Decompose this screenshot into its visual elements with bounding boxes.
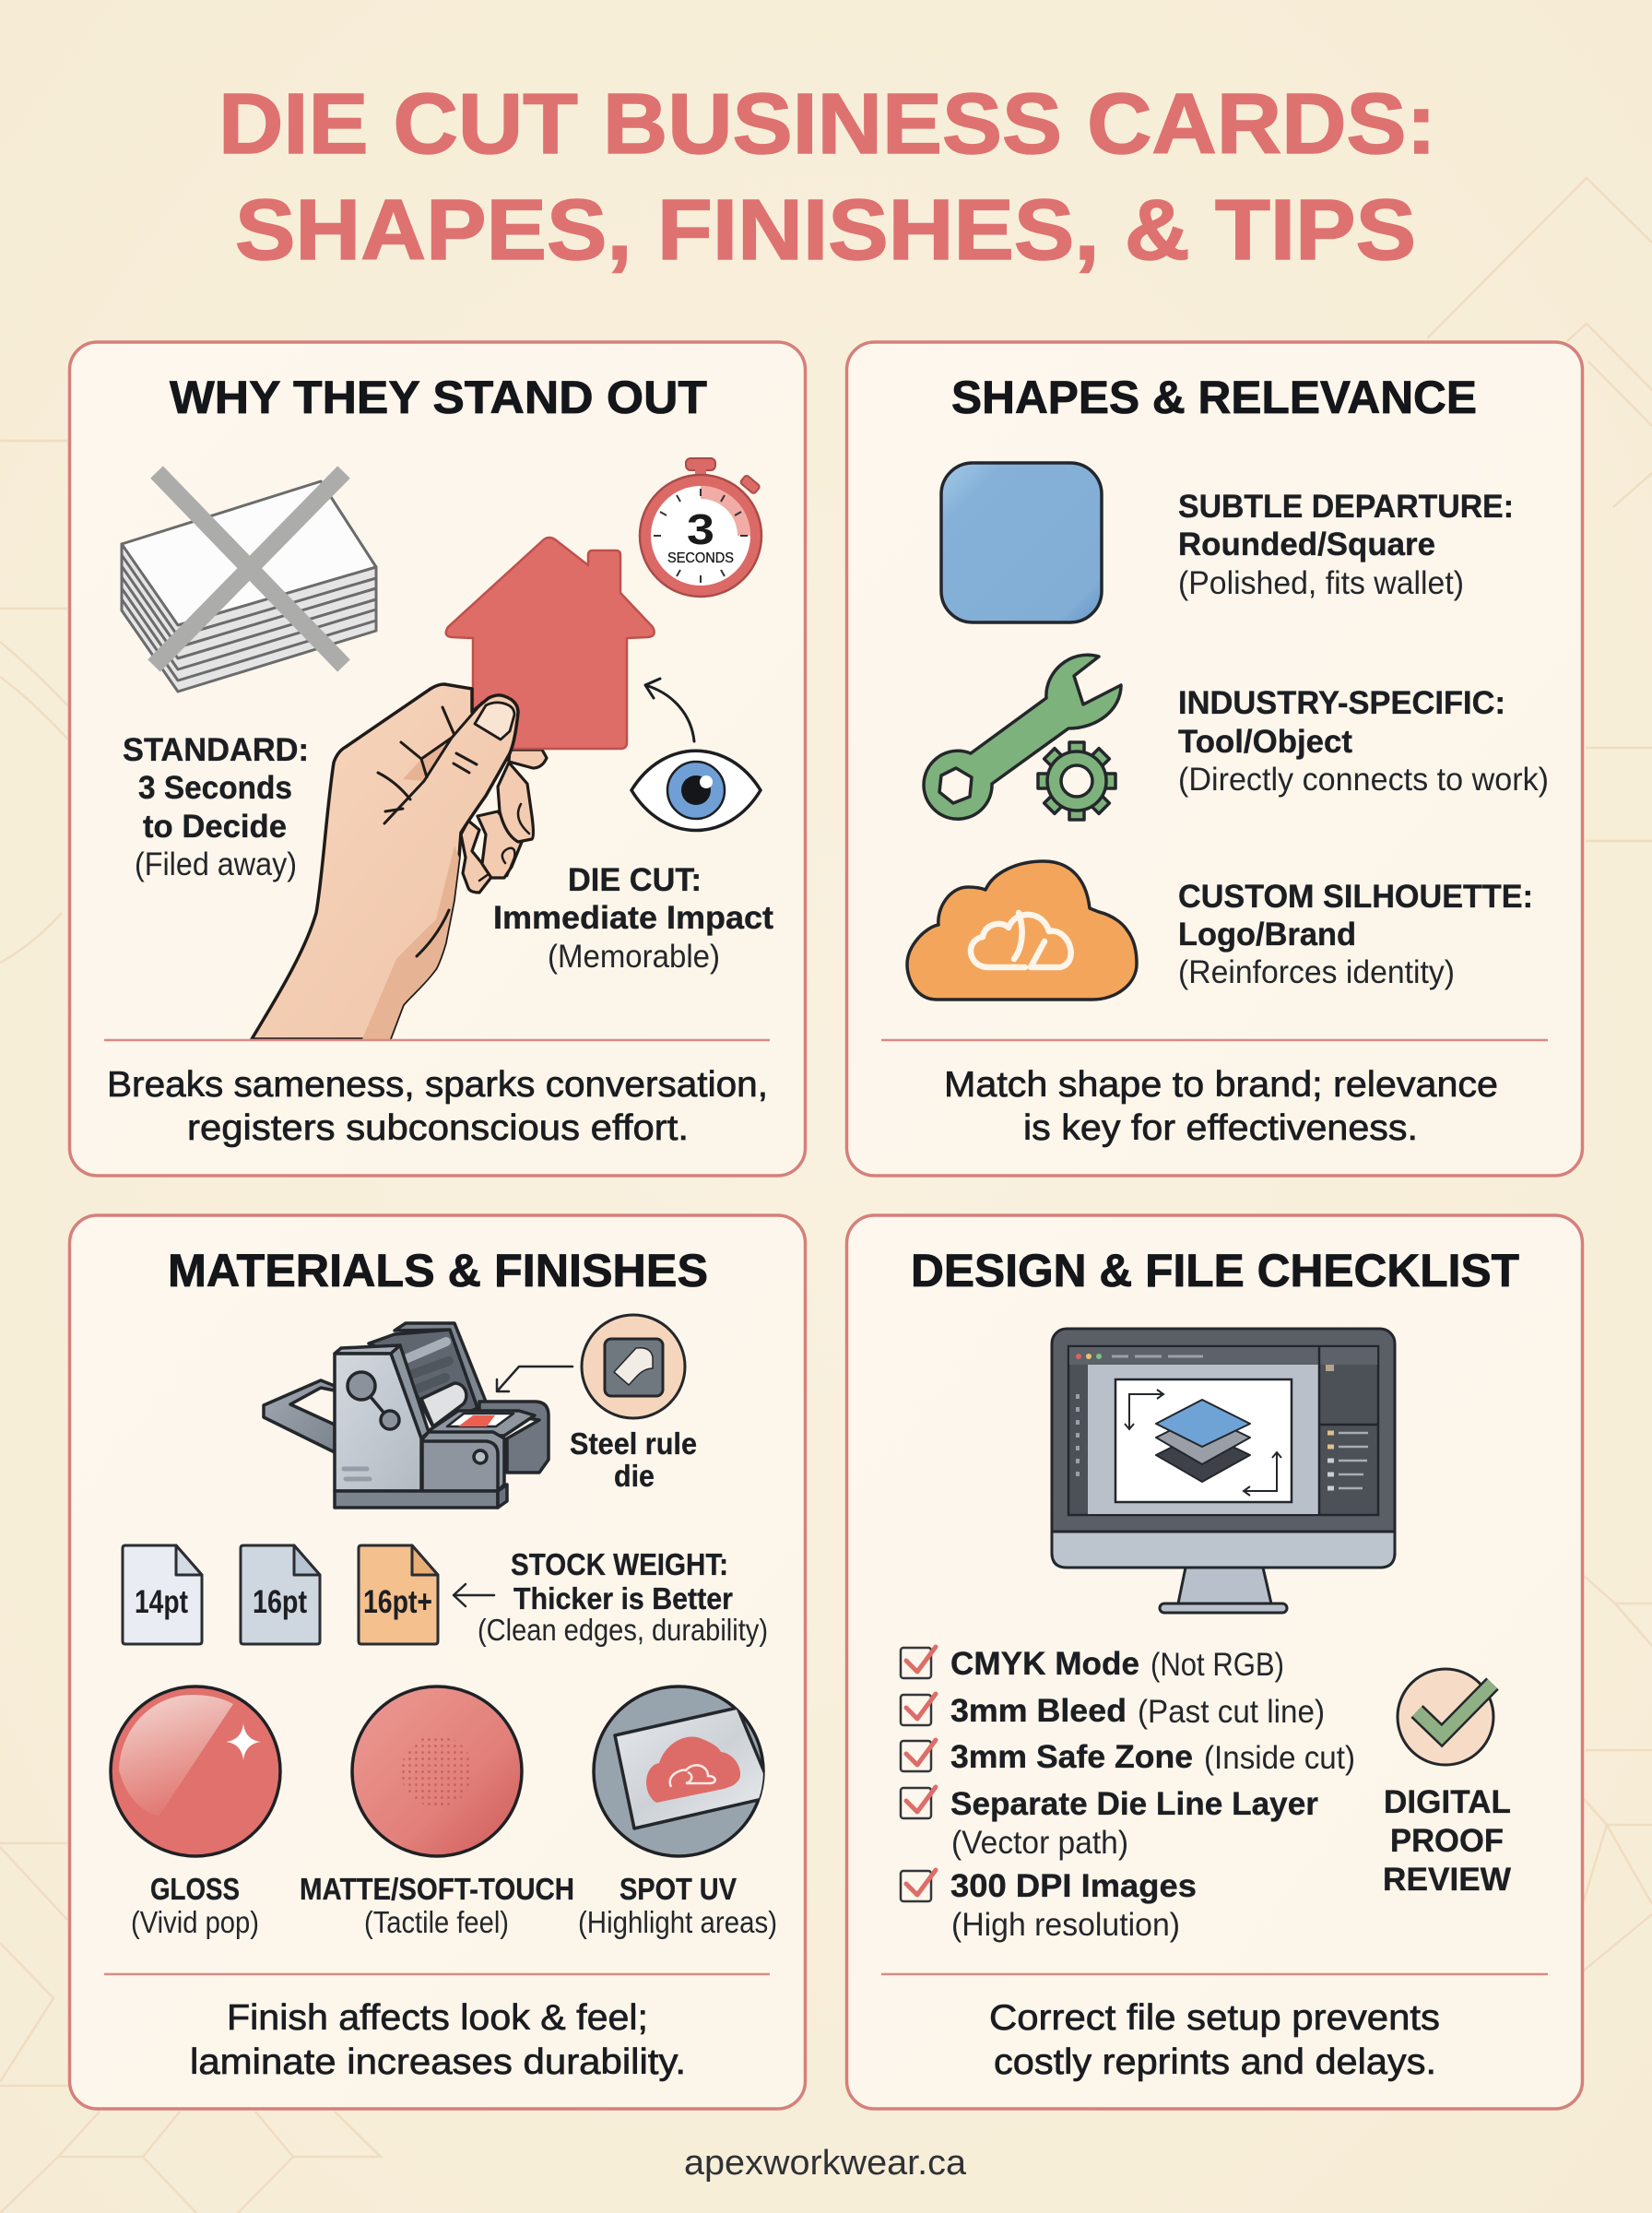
labels: spot uv: SPOT UV — [620, 1872, 737, 1906]
summary text — [107, 1065, 768, 1148]
icon: 16pt stock: 16pt — [253, 1584, 307, 1620]
icon: wrench and gear — [924, 655, 1121, 820]
icon: stopwatch showing 3 seconds: SECONDS — [667, 550, 734, 566]
text: die cut: Immediate Impact — [493, 900, 773, 936]
icon: hand holding card — [252, 684, 518, 1039]
text: industry specific: INDUSTRY-SPECIFIC: — [1178, 685, 1505, 721]
labels: gloss — [131, 1872, 259, 1939]
icon: 16pt plus stock: 16pt+ — [363, 1584, 432, 1620]
summary text — [944, 1065, 1498, 1148]
label: steel rule die: Steel rule — [570, 1426, 697, 1461]
text: custom silhouette: (Reinforces identity) — [1178, 954, 1455, 990]
summary text: registers subconscious effort. — [187, 1108, 689, 1148]
icon: red house-shaped die cut card — [446, 538, 655, 749]
summary text — [190, 1998, 686, 2082]
summary text: Match shape to brand; relevance — [944, 1065, 1498, 1105]
checklist — [901, 1646, 1355, 1943]
item: safe zone — [901, 1739, 1355, 1776]
summary text: Breaks sameness, sparks conversation, — [107, 1065, 768, 1105]
item: die line layer — [901, 1786, 1318, 1861]
icon: stopwatch showing 3 seconds — [640, 458, 761, 597]
labels: gloss: GLOSS — [150, 1872, 240, 1906]
text: industry specific: (Directly connects to work) — [1178, 762, 1549, 798]
arrow: die to machine — [497, 1367, 572, 1391]
text: stock weight: (Clean edges, durability) — [478, 1613, 768, 1647]
title: SHAPES, FINISHES, & TIPS — [235, 182, 1416, 278]
panel: materials and finishes — [70, 1215, 806, 2109]
text: custom silhouette — [1178, 879, 1533, 990]
item: 300 dpi images: 300 DPI Images — [950, 1868, 1197, 1904]
title — [218, 76, 1436, 278]
panel: why they stand out — [70, 342, 806, 1176]
summary text: Correct file setup prevents — [989, 1998, 1440, 2038]
heading: why they stand out: WHY THEY STAND OUT — [170, 372, 707, 423]
labels: gloss: (Vivid pop) — [131, 1905, 259, 1939]
text: digital proof review: REVIEW — [1383, 1862, 1511, 1898]
item: bleed: (Past cut line) — [1138, 1694, 1325, 1730]
text: custom silhouette: Logo/Brand — [1178, 917, 1356, 953]
text: subtle departure: SUBTLE DEPARTURE: — [1178, 489, 1514, 525]
icon: digital proof check — [1398, 1669, 1493, 1765]
text: stock weight: Thicker is Better — [513, 1581, 733, 1615]
text: digital proof review: PROOF — [1390, 1823, 1504, 1859]
text: standard: 3 Seconds — [138, 770, 292, 806]
text: standard: (Filed away) — [135, 846, 297, 882]
icon: stopwatch showing 3 seconds: 3 — [687, 505, 714, 553]
arrow: toward thicker stock — [454, 1584, 494, 1606]
arrow: eye to card — [645, 679, 694, 741]
icon: 16pt plus stock — [359, 1545, 438, 1644]
icon: gloss finish — [111, 1686, 280, 1856]
text: digital proof review — [1383, 1784, 1511, 1898]
summary text: costly reprints and delays. — [994, 2042, 1436, 2082]
text: die cut: DIE CUT: — [568, 862, 702, 898]
item: die line layer: (Vector path) — [951, 1825, 1128, 1861]
item: cmyk mode — [901, 1646, 1284, 1683]
fingers behind card — [461, 750, 547, 893]
icon: 14pt stock — [123, 1545, 202, 1644]
summary text: laminate increases durability. — [190, 2042, 686, 2082]
item: cmyk mode: CMYK Mode — [950, 1646, 1139, 1682]
labels: matte: MATTE/SOFT-TOUCH — [300, 1872, 574, 1906]
icon: spot uv finish — [594, 1686, 774, 1856]
icon: desktop monitor with layers — [1052, 1329, 1395, 1613]
item: 300 dpi images — [901, 1868, 1197, 1943]
text: subtle departure: (Polished, fits wallet) — [1178, 565, 1464, 601]
text: industry specific — [1178, 685, 1549, 798]
text: standard: to Decide — [143, 809, 287, 845]
text: custom silhouette: CUSTOM SILHOUETTE: — [1178, 879, 1533, 915]
icon: 14pt stock: 14pt — [135, 1584, 188, 1620]
title: DIE CUT BUSINESS CARDS: — [218, 76, 1436, 172]
text: industry specific: Tool/Object — [1178, 724, 1352, 760]
icon: die cutting machine — [264, 1323, 549, 1508]
icon: crossed-out stack of standard cards — [122, 472, 376, 692]
text: subtle departure: Rounded/Square — [1178, 527, 1435, 562]
text: standard: STANDARD: — [123, 732, 309, 768]
icon: eye — [631, 751, 761, 830]
panel: shapes and relevance — [846, 342, 1582, 1176]
item: die line layer: Separate Die Line Layer — [950, 1786, 1318, 1822]
label: steel rule die: die — [614, 1459, 655, 1493]
text: standard — [123, 732, 309, 882]
text: subtle departure — [1178, 489, 1514, 601]
label: steel rule die — [570, 1426, 697, 1493]
item: bleed — [901, 1693, 1325, 1730]
heading: design and file checklist: DESIGN & FILE CHECKLIST — [911, 1245, 1519, 1296]
item: safe zone: 3mm Safe Zone — [950, 1739, 1193, 1775]
labels: matte — [300, 1872, 574, 1939]
item: bleed: 3mm Bleed — [950, 1693, 1127, 1729]
labels: spot uv: (Highlight areas) — [578, 1905, 777, 1939]
labels: matte: (Tactile feel) — [364, 1905, 509, 1939]
text: die cut: (Memorable) — [548, 939, 720, 975]
icon: cloud silhouette — [907, 861, 1137, 1000]
item: cmyk mode: (Not RGB) — [1150, 1647, 1284, 1683]
item: safe zone: (Inside cut) — [1204, 1740, 1355, 1776]
icon: rounded square card — [941, 463, 1102, 622]
summary text: is key for effectiveness. — [1023, 1108, 1418, 1148]
text: die cut — [493, 862, 773, 975]
heading: materials and finishes: MATERIALS & FINISHES — [168, 1245, 708, 1296]
summary text — [989, 1998, 1440, 2082]
panel: design and file checklist — [846, 1215, 1582, 2109]
summary text: Finish affects look & feel; — [227, 1998, 648, 2038]
icon: matte finish — [352, 1686, 522, 1856]
icon: 16pt stock — [241, 1545, 320, 1644]
labels: spot uv — [578, 1872, 777, 1939]
item: 300 dpi images: (High resolution) — [951, 1907, 1180, 1943]
text: stock weight: STOCK WEIGHT: — [511, 1547, 728, 1581]
footer url: apexworkwear.ca — [684, 2144, 967, 2183]
heading: shapes and relevance: SHAPES & RELEVANCE — [951, 372, 1477, 423]
text: stock weight — [478, 1547, 768, 1647]
icon: steel rule die — [582, 1315, 685, 1418]
text: digital proof review: DIGITAL — [1384, 1784, 1511, 1820]
